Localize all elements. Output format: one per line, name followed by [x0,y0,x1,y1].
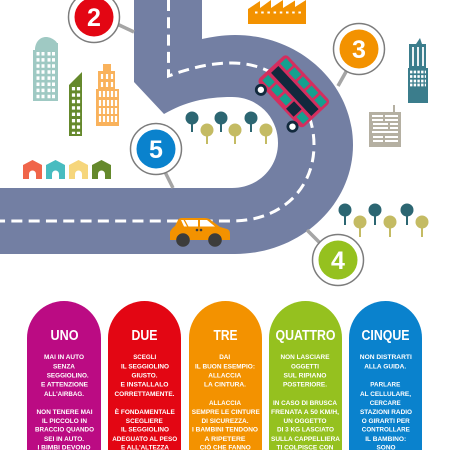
text block: cinque: O GIRARTI PER [362,418,410,425]
badge 2 [68,0,120,42]
badge 3: 3 [352,36,366,64]
badge 5 [130,124,182,174]
text block: tre [192,354,260,450]
text block: uno: SEI IN AUTO. [44,436,84,443]
text block: cinque: NON DISTRARTI [360,354,412,361]
text block: uno: E ATTENZIONE [41,382,89,388]
text block: tre: DAI [219,354,230,361]
text block: quattro: SUL RIPIANO [284,372,326,380]
panel: tre [189,301,262,450]
badge 2: 2 [87,4,101,32]
text block: due: IL SEGGIOLINO [121,364,169,370]
text block: tre: ALLACCIA [208,372,242,380]
text block: tre: LA CINTURA. [204,382,246,388]
text block: uno: IL PICCOLO IN [42,418,87,425]
text block: quattro: DI 3 KG LASCIATO [277,426,334,434]
trees inside curve [186,112,272,144]
icon: grey office building [369,105,401,147]
heading: uno: UNO [50,328,78,344]
text block: due: E INSTALLALO [120,382,168,388]
text block: cinque: CONTROLLARE [362,426,410,434]
connector: badge 5 [165,172,173,188]
panel: due [108,301,181,450]
text block: quattro: FRENATA A 50 KM/H, [271,409,339,416]
text block: cinque: PARLARE [370,382,401,388]
panel: cinque [349,301,422,450]
road [0,0,353,254]
trees lower right [338,204,428,237]
text block: tre: IL BUON ESEMPIO: [195,364,255,370]
text block: uno: ALL'AIRBAG. [44,391,84,398]
badge 5: 5 [149,136,163,164]
heading: cinque: CINQUE [362,328,410,344]
panel: uno [27,301,101,450]
text block: uno: MAI IN AUTO [44,354,84,361]
text block: cinque: AL CELLULARE, [360,391,411,398]
icon: dark teal skyscraper [408,38,428,103]
icon: factory [248,0,306,24]
text block: tre: A RIPETERE [204,436,246,443]
badge 4 [312,234,364,286]
connector: badge 3 [338,70,347,86]
text block: quattro: OGGETTI [291,364,319,370]
text block: cinque: CERCARE [370,400,401,407]
text block: cinque: STAZIONI RADIO [360,409,412,416]
icon: light teal tower [33,37,58,101]
text block: cinque [360,354,412,450]
text block: uno: NON TENERE MAI [36,409,93,416]
text block: due: IL SEGGIOLINO [121,426,169,434]
text block: uno: BRACCIO QUANDO [35,426,94,434]
connector: badge 4 [307,230,321,244]
heading: due: DUE [132,328,158,344]
text block: uno [35,354,94,450]
text block: due: SCEGLIERE [126,418,163,425]
text block: quattro: UN OGGETTO [284,418,326,425]
text block: tre: DI SICUREZZA. [202,418,249,425]
text block: tre: I BAMBINI TENDONO [192,426,258,434]
text block: due: È FONDAMENTALE [115,407,175,416]
text block: quattro [271,354,340,450]
badge 3 [334,24,384,74]
text block: quattro: IN CASO DI BRUSCA [273,400,337,407]
icon: double-decker bus [250,54,331,136]
heading: tre: TRE [214,328,238,344]
text block: quattro: POSTERIORE. [283,382,327,388]
text block: cinque: ALLA GUIDA. [364,364,406,370]
text block: due: SCEGLI [133,354,156,361]
icon: row of houses [23,160,111,179]
text block: quattro: SULLA CAPPELLIERA [271,436,340,443]
icon: green tower [69,72,82,136]
text block: due: CORRETTAMENTE. [114,391,175,398]
text block: cinque: IL BAMBINO: [365,436,406,443]
text block: quattro: NON LASCIARE [280,354,330,361]
text block: tre: SEMPRE LE CINTURE [192,409,260,416]
panel: quattro [269,301,342,450]
icon: orange car [170,218,230,247]
text block: uno: SEGGIOLINO. [47,372,89,380]
text block: due [112,354,177,450]
text block: due: GIUSTO. [132,372,158,380]
connector: badge 2 [117,24,134,32]
icon: orange tower [96,64,119,126]
heading: quattro: QUATTRO [276,328,336,344]
text block: tre: ALLACCIA [209,400,241,407]
badge 4: 4 [331,247,345,275]
text block: uno: SENZA [53,364,75,370]
text block: due: ADEGUATO AL PESO [112,436,177,443]
